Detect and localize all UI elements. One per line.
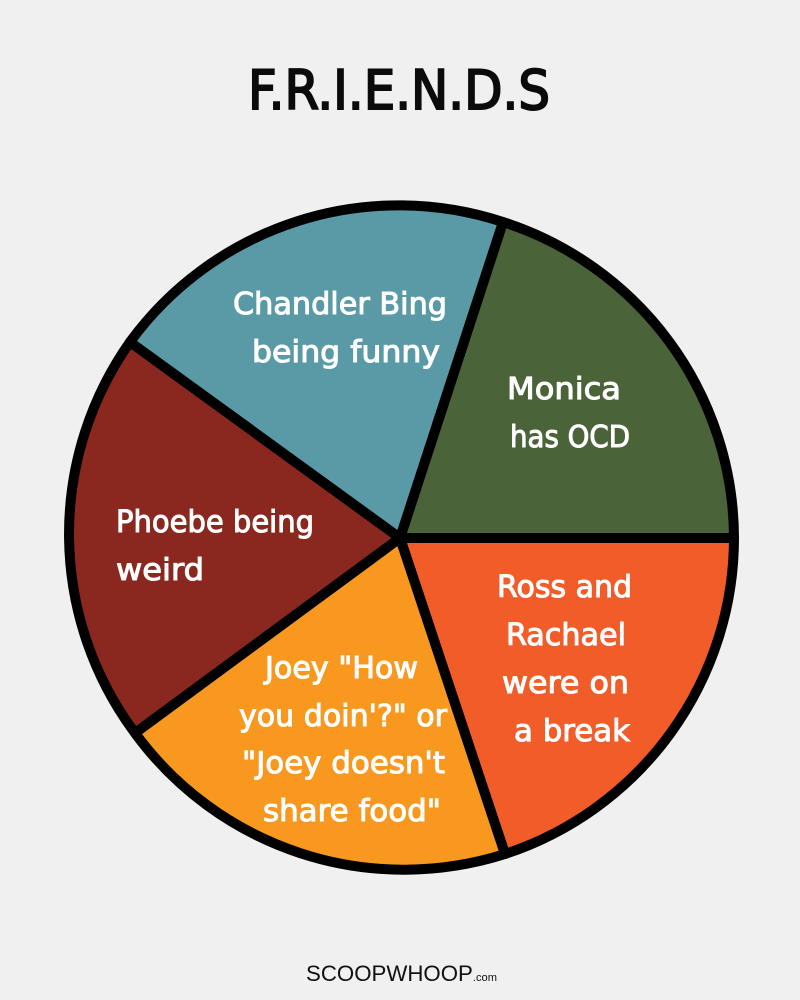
slice: Ross and Rachael <box>400 538 734 854</box>
label: Ross and Rachael were on a break: Rachael <box>506 618 626 653</box>
slice: Chandler <box>130 205 503 538</box>
label: Joey quotes: you doin'?" or <box>239 699 448 734</box>
label: Monica has OCD <box>507 372 630 455</box>
label: Monica has OCD: Monica <box>507 372 621 407</box>
slice: Monica has OCD <box>400 222 734 538</box>
footer logo: SCOOPWHOOP.com <box>306 961 497 986</box>
label: Chandler Bing being funny: being funny <box>252 335 440 370</box>
label: Phoebe being weird: weird <box>116 553 204 588</box>
label: Ross and Rachael were on a break: were on <box>502 666 629 701</box>
label: Monica has OCD: has OCD <box>510 420 630 455</box>
label: Ross and Rachael were on a break <box>497 570 632 749</box>
label: Ross and Rachael were on a break: a break <box>514 714 631 749</box>
label: Joey quotes: Joey "How <box>263 651 418 686</box>
label: Joey quotes: "Joey doesn't <box>242 746 445 781</box>
pie chart <box>69 205 734 870</box>
label: Phoebe being weird: Phoebe being <box>116 505 314 540</box>
label: Chandler Bing being funny <box>233 287 447 370</box>
label: Phoebe being weird <box>116 505 314 588</box>
label: Joey quotes: share food" <box>263 794 441 829</box>
label: Chandler Bing being funny: Chandler Bing <box>233 287 447 322</box>
label: Joey quotes <box>239 651 448 829</box>
slice: Phoebe <box>69 342 400 733</box>
label: Ross and Rachael were on a break: Ross and <box>497 570 632 605</box>
title: F.R.I.E.N.D.S <box>248 59 550 122</box>
slice: Joey <box>135 538 505 870</box>
